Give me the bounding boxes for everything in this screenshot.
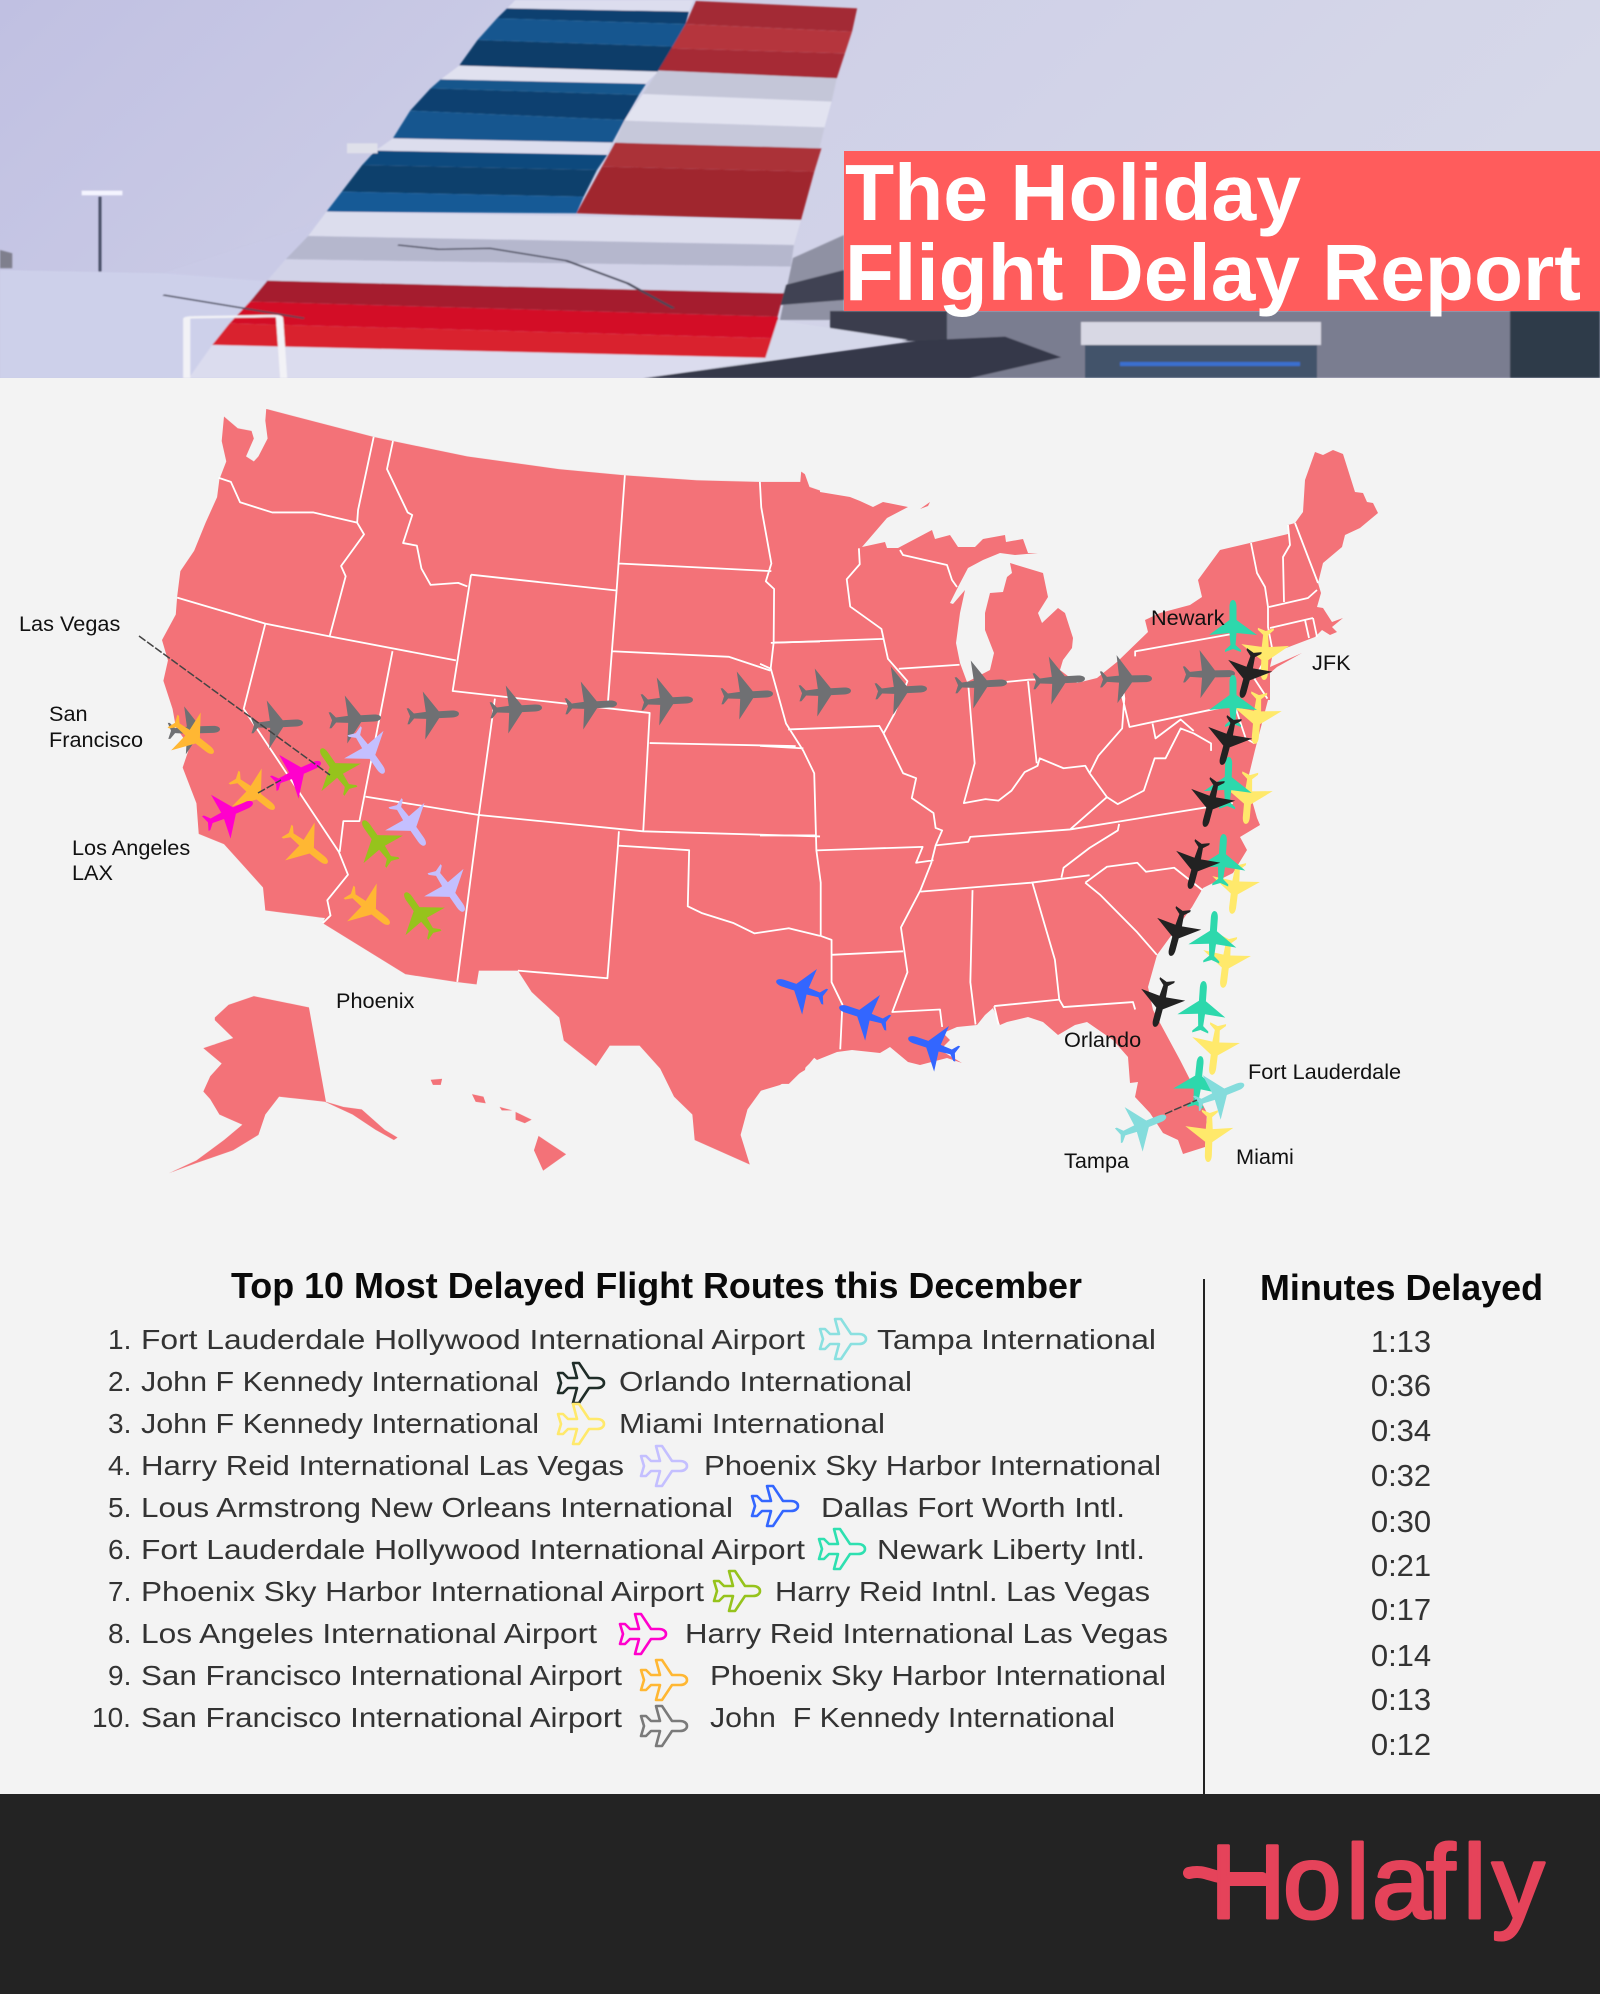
city labels: LAX (72, 860, 114, 885)
city labels: Orlando (1064, 1027, 1141, 1052)
route 9 planes: San Francisco to Phoenix (158, 702, 404, 943)
city labels: San (49, 701, 88, 726)
route 2: 2. (108, 1366, 131, 1397)
route 6 (108, 1529, 1145, 1569)
route 5 planes: New Orleans to Dallas (769, 958, 965, 1077)
route 2 (108, 1363, 912, 1403)
route 5 (108, 1486, 1125, 1526)
footer (0, 1794, 1600, 1994)
minutes delayed values: 0:13 (1371, 1682, 1431, 1717)
route 4 (108, 1446, 1161, 1486)
route 2: Orlando International (619, 1366, 912, 1397)
map of the United States (19, 409, 1401, 1173)
route 7: 7. (108, 1576, 131, 1607)
map: eastern states fill (760, 450, 1378, 1154)
route 3: Miami International (619, 1408, 885, 1439)
route 3 planes: JFK to Miami (1184, 627, 1290, 1163)
route 4: Harry Reid International Las Vegas (141, 1450, 624, 1481)
minutes delayed values (1371, 1324, 1431, 1762)
minutes delayed values: 0:32 (1371, 1458, 1431, 1493)
route 1: Fort Lauderdale Hollywood International Airport (141, 1324, 805, 1355)
city labels: Francisco (49, 727, 143, 752)
route list (92, 1319, 1168, 1746)
city labels: JFK (1312, 650, 1351, 675)
route 8: Harry Reid International Las Vegas (685, 1618, 1168, 1649)
route 9: Phoenix Sky Harbor International (710, 1660, 1166, 1691)
minutes delayed values: 0:30 (1371, 1504, 1431, 1539)
city labels: Miami (1236, 1144, 1294, 1169)
route 5: Dallas Fort Worth Intl. (821, 1492, 1125, 1523)
route 7: Phoenix Sky Harbor International Airport (141, 1576, 704, 1607)
route 1 planes: Fort Lauderdale to Tampa (1109, 1062, 1253, 1158)
route 4: Phoenix Sky Harbor International (704, 1450, 1161, 1481)
minutes delayed values: 0:14 (1371, 1638, 1431, 1673)
route 4 planes: Las Vegas to Phoenix (334, 717, 484, 925)
route 10 (92, 1702, 1115, 1746)
map: northern state borders (900, 523, 1318, 653)
route 9: San Francisco International Airport (141, 1660, 622, 1691)
route 10: San Francisco International Airport (141, 1702, 622, 1733)
city labels (19, 605, 1401, 1173)
route 7: Harry Reid Intnl. Las Vegas (775, 1576, 1150, 1607)
route 8 planes: Los Angeles to Las Vegas (195, 740, 331, 846)
route 9 (108, 1660, 1166, 1700)
route 6 planes: Fort Lauderdale to Newark (1171, 600, 1257, 1110)
title banner (844, 148, 1600, 317)
map: Isle Royale (920, 502, 930, 509)
heading: top 10 routes: Top 10 Most Delayed Flight Routes this December (231, 1265, 1082, 1306)
route 10: John F Kennedy International (710, 1702, 1115, 1733)
minutes delayed values: 0:36 (1371, 1368, 1431, 1403)
route 9: 9. (108, 1660, 131, 1691)
map: western states (162, 409, 820, 1173)
route 7 planes: Phoenix to Las Vegas (301, 735, 455, 949)
heading: minutes delayed: Minutes Delayed (1260, 1267, 1543, 1308)
route 5: 5. (108, 1492, 131, 1523)
route 2: John F Kennedy International (141, 1366, 539, 1397)
route 1 (108, 1319, 1156, 1359)
route 3: John F Kennedy International (141, 1408, 539, 1439)
title: The Holiday (845, 148, 1302, 237)
minutes delayed values: 0:34 (1371, 1413, 1431, 1448)
route 5: Lous Armstrong New Orleans International (141, 1492, 733, 1523)
city labels: Phoenix (336, 988, 415, 1013)
minutes delayed values: 0:12 (1371, 1727, 1431, 1762)
route 1: Tampa International (877, 1324, 1156, 1355)
route 7 (108, 1571, 1150, 1611)
Hawaii (431, 1079, 566, 1171)
route 10 planes: San Francisco to JFK (167, 650, 1235, 755)
route 4: 4. (108, 1450, 131, 1481)
city labels: Fort Lauderdale (1248, 1059, 1401, 1084)
route 6: 6. (108, 1534, 131, 1565)
city labels: Tampa (1064, 1148, 1130, 1173)
background terminal building (780, 235, 844, 320)
route 6: Newark Liberty Intl. (877, 1534, 1145, 1565)
minutes delayed values: 0:21 (1371, 1548, 1431, 1583)
dashed route lines (139, 636, 1197, 1114)
city labels: Los Angeles (72, 835, 190, 860)
Alaska (169, 996, 398, 1173)
city labels: Newark (1151, 605, 1225, 630)
map: eastern state borders (760, 548, 1267, 1049)
route 10: 10. (92, 1702, 131, 1733)
city labels: Las Vegas (19, 611, 120, 636)
header photo: airplane tail (0, 0, 1600, 378)
route 8: Los Angeles International Airport (141, 1618, 597, 1649)
title banner: Flight Delay Report (845, 228, 1581, 317)
route 1: 1. (108, 1324, 131, 1355)
route 8: 8. (108, 1618, 131, 1649)
route 3: 3. (108, 1408, 131, 1439)
map: western state borders (177, 437, 820, 982)
route 6: Fort Lauderdale Hollywood International Airport (141, 1534, 805, 1565)
route 3 (108, 1404, 885, 1444)
minutes delayed values: 0:17 (1371, 1592, 1431, 1627)
route 2 planes: JFK to Orlando (1133, 644, 1276, 1033)
route 8 (108, 1614, 1168, 1654)
minutes delayed values: 1:13 (1371, 1324, 1431, 1359)
logo: Holafly: Holafly (1210, 1824, 1545, 1941)
